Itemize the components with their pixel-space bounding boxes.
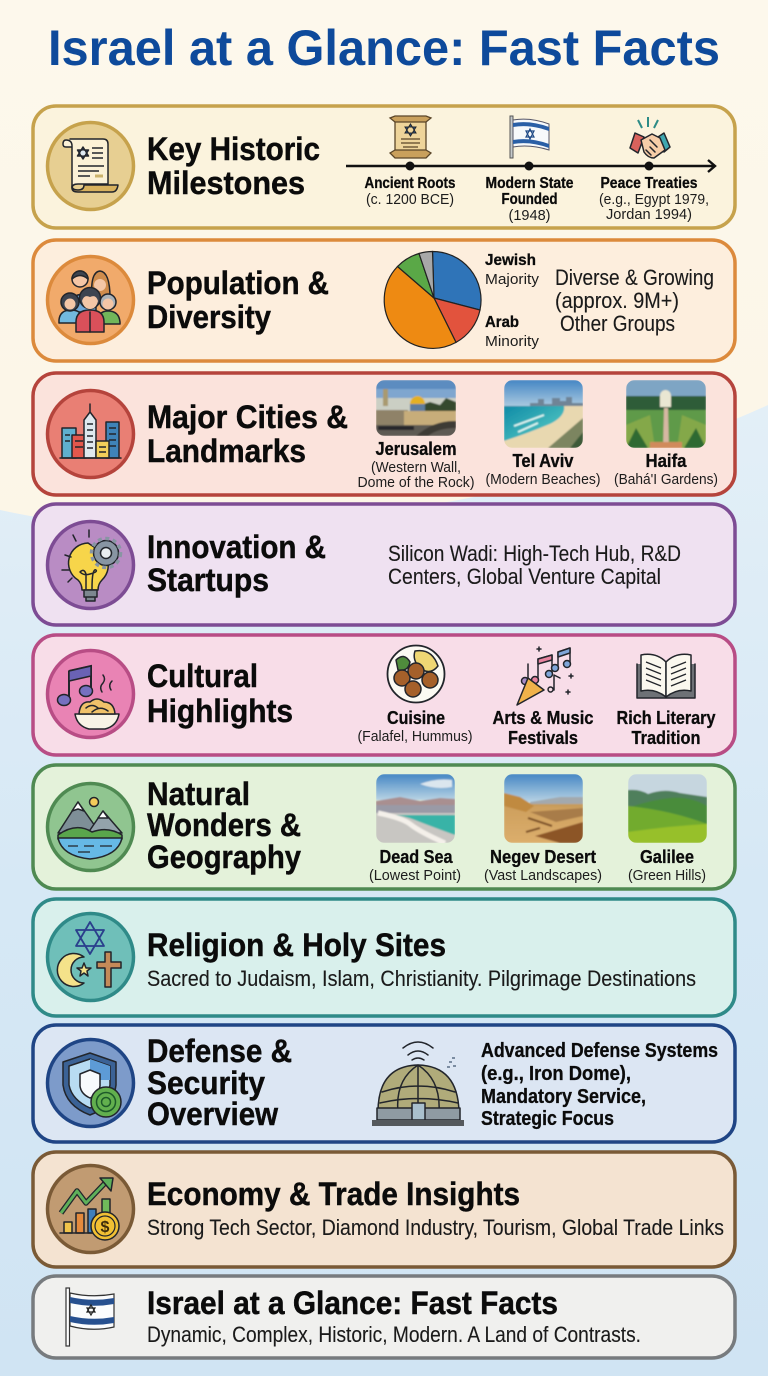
- label: haifa: Haifa: [646, 451, 687, 471]
- icon: israeli flag: [66, 1288, 114, 1346]
- heading: Natural: [147, 776, 250, 812]
- heading: Overview: [147, 1096, 278, 1132]
- photo: tel aviv: [504, 380, 583, 448]
- label: arts and music: [492, 708, 594, 748]
- heading: [147, 529, 326, 598]
- milestone: peace treaties: [599, 175, 709, 223]
- heading: Key Historic: [147, 131, 320, 167]
- label: haifa: (Bahá'I Gardens): [614, 471, 718, 488]
- heading: [147, 265, 329, 335]
- heading: Diversity: [147, 299, 271, 335]
- milestone: modern state: Founded: [502, 191, 558, 208]
- heading: Innovation &: [147, 529, 326, 565]
- pie labels: Minority: [485, 333, 540, 350]
- heading: Security: [147, 1065, 265, 1101]
- label: negev desert: Negev Desert: [490, 847, 596, 867]
- label: dead sea: [369, 847, 461, 884]
- pie labels: Jewish: [485, 252, 536, 269]
- icon: light bulb with gear: [48, 522, 134, 608]
- milestone: modern state: [486, 175, 574, 224]
- label: jerusalem: Jerusalem: [376, 439, 456, 459]
- defense text: Advanced Defense Systems: [481, 1040, 718, 1062]
- icon: people: [48, 256, 134, 344]
- heading: Geography: [147, 839, 301, 875]
- population text: (approx. 9M+): [555, 288, 679, 313]
- heading: Major Cities &: [147, 399, 348, 435]
- heading: Population &: [147, 265, 329, 301]
- label: galilee: Galilee: [640, 847, 694, 867]
- milestone: peace treaties: Jordan 1994): [606, 206, 692, 223]
- icon: scroll: [48, 122, 134, 210]
- panel: key historic milestones: [33, 106, 735, 228]
- label: negev desert: (Vast Landscapes): [484, 867, 602, 884]
- icon: growth chart and coin: [48, 1166, 134, 1252]
- label: galilee: (Green Hills): [628, 867, 706, 884]
- photo: dead sea: [376, 774, 455, 843]
- heading: Wonders &: [147, 807, 301, 843]
- heading: Landmarks: [147, 433, 306, 469]
- heading: Startups: [147, 562, 269, 598]
- label: cuisine: [358, 708, 472, 745]
- photo: jerusalem: [376, 380, 456, 436]
- panel: summary: [33, 1276, 735, 1358]
- icon: city skyline: [48, 390, 134, 478]
- label: dead sea: (Lowest Point): [369, 867, 461, 884]
- label: tel aviv: [486, 451, 600, 488]
- panel: economy and trade: [33, 1152, 735, 1267]
- heading: Defense &: [147, 1033, 292, 1069]
- heading: [147, 776, 301, 875]
- milestone: peace treaties: (e.g., Egypt 1979,: [599, 191, 709, 208]
- pie labels: [485, 252, 540, 350]
- panel: innovation and startups: [33, 504, 735, 625]
- label: negev desert: [484, 847, 602, 884]
- heading: Religion & Holy Sites: [147, 927, 446, 963]
- innovation text: Silicon Wadi: High-Tech Hub, R&D: [388, 541, 681, 566]
- label: jerusalem: Dome of the Rock): [358, 474, 475, 491]
- label: literary tradition: [616, 708, 716, 748]
- icon: open book: [637, 654, 695, 698]
- label: arts and music: Festivals: [508, 728, 578, 748]
- title: Israel at a Glance: Fast Facts: [48, 20, 720, 76]
- label: literary tradition: Rich Literary: [616, 708, 716, 728]
- label: jerusalem: (Western Wall,: [371, 459, 461, 476]
- label: galilee: [628, 847, 706, 884]
- icon: mountains and lake: [48, 784, 134, 870]
- icon: israeli flag: [510, 116, 549, 158]
- population text: Other Groups: [560, 311, 675, 336]
- defense text: Mandatory Service,: [481, 1086, 646, 1108]
- heading: [147, 399, 348, 469]
- panel: cultural highlights: [33, 635, 735, 755]
- heading: Economy & Trade Insights: [147, 1176, 520, 1212]
- panel: religion and holy sites: [33, 899, 735, 1016]
- icon: religious symbols: [48, 914, 134, 1000]
- label: cuisine: (Falafel, Hummus): [358, 728, 472, 745]
- heading: Cultural: [147, 658, 258, 694]
- defense text: [481, 1040, 718, 1130]
- timeline arrow: [346, 160, 715, 172]
- label: tel aviv: Tel Aviv: [512, 451, 574, 471]
- milestone: modern state: (1948): [508, 207, 551, 224]
- icon: falafel plate: [388, 646, 444, 702]
- panel: natural wonders and geography: [33, 765, 735, 889]
- population text: Diverse & Growing: [555, 265, 714, 290]
- photo: galilee: [628, 774, 707, 843]
- icon: iron dome: [372, 1042, 464, 1126]
- icon: ancient scroll: [390, 116, 431, 158]
- heading: Highlights: [147, 693, 293, 729]
- label: cuisine: Cuisine: [387, 708, 445, 728]
- icon: shield: [48, 1040, 134, 1126]
- milestone: ancient roots: (c. 1200 BCE): [366, 191, 454, 208]
- label: jerusalem: [358, 439, 475, 491]
- icon: music and festivals: [517, 647, 573, 705]
- heading: [147, 658, 293, 729]
- panel: population and diversity: [33, 240, 735, 361]
- heading: [147, 131, 320, 201]
- icon: handshake: [630, 117, 670, 158]
- heading: Israel at a Glance: Fast Facts: [147, 1285, 558, 1321]
- label: haifa: [614, 451, 718, 488]
- panel: major cities and landmarks: [33, 373, 735, 495]
- pie chart: [384, 251, 481, 348]
- milestone: peace treaties: Peace Treaties: [600, 175, 698, 192]
- heading: [147, 1033, 292, 1132]
- pie labels: Majority: [485, 271, 540, 288]
- label: dead sea: Dead Sea: [380, 847, 453, 867]
- label: arts and music: Arts & Music: [492, 708, 594, 728]
- label: literary tradition: Tradition: [632, 728, 700, 748]
- defense text: Strategic Focus: [481, 1108, 614, 1130]
- icon: growth chart and coin: $: [101, 1219, 110, 1236]
- milestone: modern state: Modern State: [486, 175, 574, 192]
- milestone: ancient roots: Ancient Roots: [364, 175, 456, 192]
- pie labels: Arab: [485, 314, 519, 331]
- milestone: ancient roots: [364, 175, 456, 208]
- photo: haifa: [626, 380, 706, 448]
- body text: Dynamic, Complex, Historic, Modern. A Land of Contrasts.: [147, 1322, 641, 1347]
- icon: music note and food bowl: [48, 650, 134, 738]
- panel: defense and security: [33, 1025, 735, 1142]
- defense text: (e.g., Iron Dome),: [481, 1063, 631, 1085]
- innovation text: [388, 541, 681, 589]
- body text: Sacred to Judaism, Islam, Christianity. Pilgrimage Destinations: [147, 966, 696, 991]
- innovation text: Centers, Global Venture Capital: [388, 564, 661, 589]
- label: tel aviv: (Modern Beaches): [486, 471, 600, 488]
- photo: negev desert: [504, 774, 583, 843]
- population text: [555, 265, 714, 336]
- heading: Milestones: [147, 165, 305, 201]
